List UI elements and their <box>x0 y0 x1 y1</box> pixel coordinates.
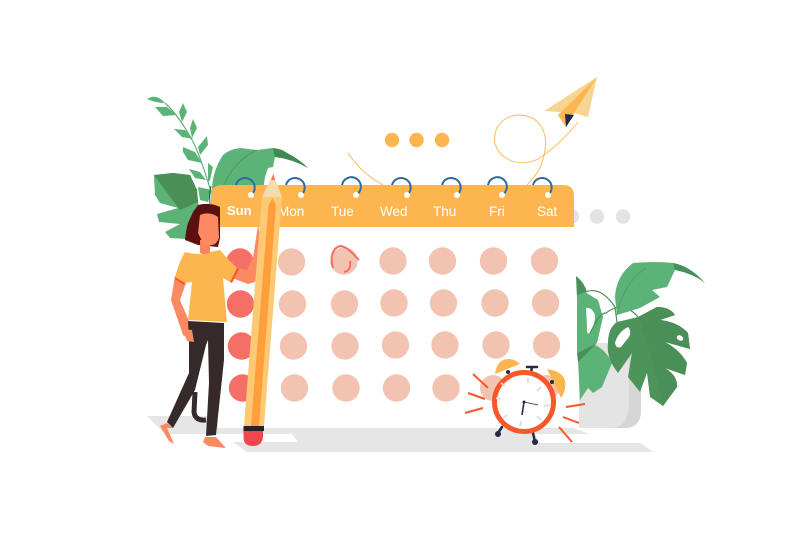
weekday labels: Fri <box>489 204 505 219</box>
bells <box>495 359 520 374</box>
pot shade <box>610 350 641 428</box>
stems <box>585 291 638 333</box>
hand-drawn circle marking a date <box>332 246 359 272</box>
pale dots behind clock <box>480 375 559 401</box>
plant: top-left vine <box>147 97 213 202</box>
calendar page <box>211 220 578 428</box>
loose gray dots <box>574 209 630 224</box>
pot <box>579 343 641 428</box>
flight trail curves <box>348 115 578 185</box>
hair back <box>185 204 220 247</box>
plant: large leaf behind calendar <box>212 148 308 190</box>
paper plane <box>544 77 597 127</box>
alarm rays <box>465 374 585 442</box>
pencil centre stripe <box>251 198 276 426</box>
floor shadows <box>147 416 654 452</box>
clock hands <box>522 402 538 415</box>
clock face <box>494 372 554 432</box>
lowered arm <box>171 276 193 342</box>
person <box>160 204 262 448</box>
calendar header bar <box>211 185 574 227</box>
top handle <box>527 367 537 372</box>
calendar <box>211 177 630 428</box>
bell pins <box>506 370 510 374</box>
weekday labels: Sun <box>227 203 252 218</box>
weekday labels: Thu <box>433 204 456 219</box>
tick marks <box>496 378 550 426</box>
monstera leaf <box>608 307 690 406</box>
pencil body <box>244 197 282 426</box>
feet <box>160 423 225 448</box>
back leg <box>194 392 206 420</box>
cut-off leaves at calendar edge <box>576 276 587 298</box>
back leaf <box>615 262 705 315</box>
t-shirt <box>175 250 237 322</box>
date dots: other days <box>278 247 560 402</box>
weekday labels: Wed <box>380 204 408 219</box>
weekday labels <box>227 203 558 219</box>
pencil <box>244 174 282 446</box>
dots above calendar <box>385 133 449 147</box>
eraser <box>244 431 263 446</box>
alarm clock <box>465 359 585 445</box>
weekday labels: Tue <box>331 204 354 219</box>
hand on hip <box>183 329 194 342</box>
pencil band <box>244 426 264 431</box>
plant: right side pot with leaves <box>576 262 705 428</box>
clock legs <box>498 427 535 442</box>
neck <box>200 240 210 254</box>
raised arm <box>232 225 262 284</box>
trousers <box>167 321 224 436</box>
date dots: sunday column <box>226 248 256 402</box>
ring holes <box>248 192 551 198</box>
sleeve cuffs <box>175 268 239 285</box>
binder rings <box>236 177 552 195</box>
pencil tip <box>262 174 282 197</box>
plant: monstera leaf left <box>154 173 211 240</box>
weekday labels: Mon <box>278 204 304 219</box>
weekday labels: Sat <box>537 204 558 219</box>
face <box>198 213 219 245</box>
